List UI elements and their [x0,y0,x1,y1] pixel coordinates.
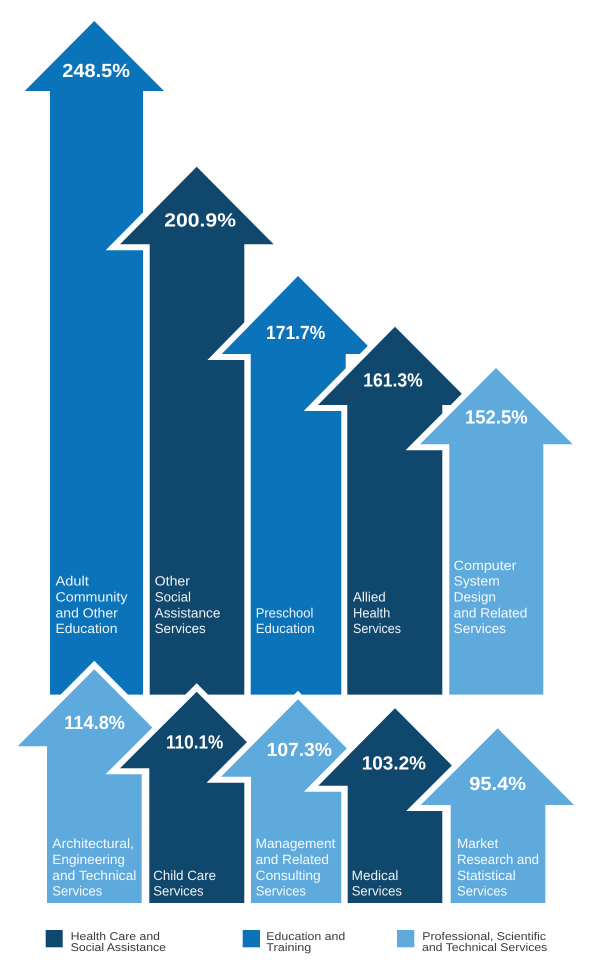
arrow: Adult Community and Other Education 248.5%: Adult [56,574,89,589]
arrow: Medical Services 103.2% [318,708,472,903]
legend: Health Care and Social Assistance [46,930,166,954]
legend: Health Care and Social Assistance: Social Assistance [71,942,166,954]
arrow: Allied Health Services 161.3% [318,327,473,695]
arrow: Adult Community and Other Education 248.5%: and Other [56,605,118,620]
arrow: Architectural, Engineering and Technical Services 114.8%: 114.8% [64,713,125,734]
legend: Education and Training [243,930,345,954]
arrow: Other Social Assistance Services 200.9%: Social [155,590,191,604]
arrow: Computer System Design and Related Services 152.5%: System [454,574,500,589]
legend: Education and Training: Training [266,942,311,954]
arrow: Adult Community and Other Education 248.5%: Community [56,590,128,604]
arrow: Architectural, Engineering and Technical Services 114.8%: Services [52,884,103,899]
arrow: Preschool Education 171.7% [222,276,376,695]
arrow: Computer System Design and Related Services 152.5%: Design [454,590,496,604]
arrow: Market Research and Statistical Services 95.4%: Statistical [457,868,516,883]
arrow: Computer System Design and Related Services 152.5%: and Related [454,605,527,620]
legend: Professional, Scientific and Technical Services: Professional, Scientific [422,931,546,943]
arrow: Adult Community and Other Education 248.5%: 248.5% [62,61,130,82]
arrow: Management and Related Consulting Services 107.3%: 107.3% [267,740,332,761]
arrow: Computer System Design and Related Services 152.5%: 152.5% [465,408,528,429]
arrow: Management and Related Consulting Services 107.3%: and Related [256,852,329,867]
arrow: Management and Related Consulting Services 107.3%: Services [256,884,306,899]
arrow: Adult Community and Other Education 248.5%: Education [56,621,118,636]
arrow: Adult Community and Other Education 248.5% [25,21,164,695]
arrow: Market Research and Statistical Services 95.4%: Research and [457,852,539,867]
arrow: Architectural, Engineering and Technical Services 114.8%: Engineering [52,852,125,867]
arrow: Medical Services 103.2%: Medical [352,868,398,883]
arrow: Market Research and Statistical Services 95.4%: Services [457,884,507,899]
arrow: Management and Related Consulting Services 107.3%: Management [256,836,336,851]
arrow: Market Research and Statistical Services 95.4%: Market [457,836,499,851]
arrow: Other Social Assistance Services 200.9%: Services [155,621,206,636]
arrow: Preschool Education 171.7%: 171.7% [266,323,325,344]
legend: Health Care and Social Assistance: Health Care and [71,931,160,943]
arrow: Computer System Design and Related Services 152.5%: Computer [454,558,517,573]
arrow: Computer System Design and Related Services 152.5% [420,368,573,695]
arrow: Architectural, Engineering and Technical Services 114.8%: Architectural, [52,836,134,851]
arrow: Architectural, Engineering and Technical Services 114.8%: and Technical [52,868,136,883]
legend: Professional, Scientific and Technical Services: and Technical Services [422,942,548,954]
arrow: Medical Services 103.2%: Services [352,884,402,899]
arrow: Child Care Services 110.1%: Child Care [153,868,216,883]
arrow: Other Social Assistance Services 200.9%: 200.9% [164,211,236,232]
arrow: Computer System Design and Related Services 152.5%: Services [454,621,506,636]
arrow: Allied Health Services 161.3%: 161.3% [363,370,423,391]
legend: Professional, Scientific and Technical Services [397,930,548,954]
arrow: Child Care Services 110.1%: Services [153,884,204,899]
arrow: Other Social Assistance Services 200.9%: Other [155,574,191,589]
arrow: Management and Related Consulting Services 107.3%: Consulting [256,868,321,883]
arrow: Preschool Education 171.7%: Education [256,621,315,636]
arrow: Market Research and Statistical Services 95.4%: 95.4% [469,774,526,795]
arrow: Child Care Services 110.1%: 110.1% [166,733,223,754]
arrow: Market Research and Statistical Services 95.4% [421,728,574,903]
arrow: Management and Related Consulting Services 107.3% [221,699,375,903]
arrow: Preschool Education 171.7%: Preschool [256,605,313,620]
arrow: Allied Health Services 161.3%: Health [353,605,390,620]
legend: Education and Training: Education and [266,931,345,943]
arrow: Medical Services 103.2%: 103.2% [362,753,426,774]
arrow: Allied Health Services 161.3%: Allied [353,590,386,604]
arrow: Other Social Assistance Services 200.9%: Assistance [155,605,220,620]
arrow: Other Social Assistance Services 200.9% [120,167,274,695]
arrow: Architectural, Engineering and Technical Services 114.8% [18,669,171,903]
arrow: Allied Health Services 161.3%: Services [353,621,401,636]
arrow: Child Care Services 110.1% [120,692,273,903]
